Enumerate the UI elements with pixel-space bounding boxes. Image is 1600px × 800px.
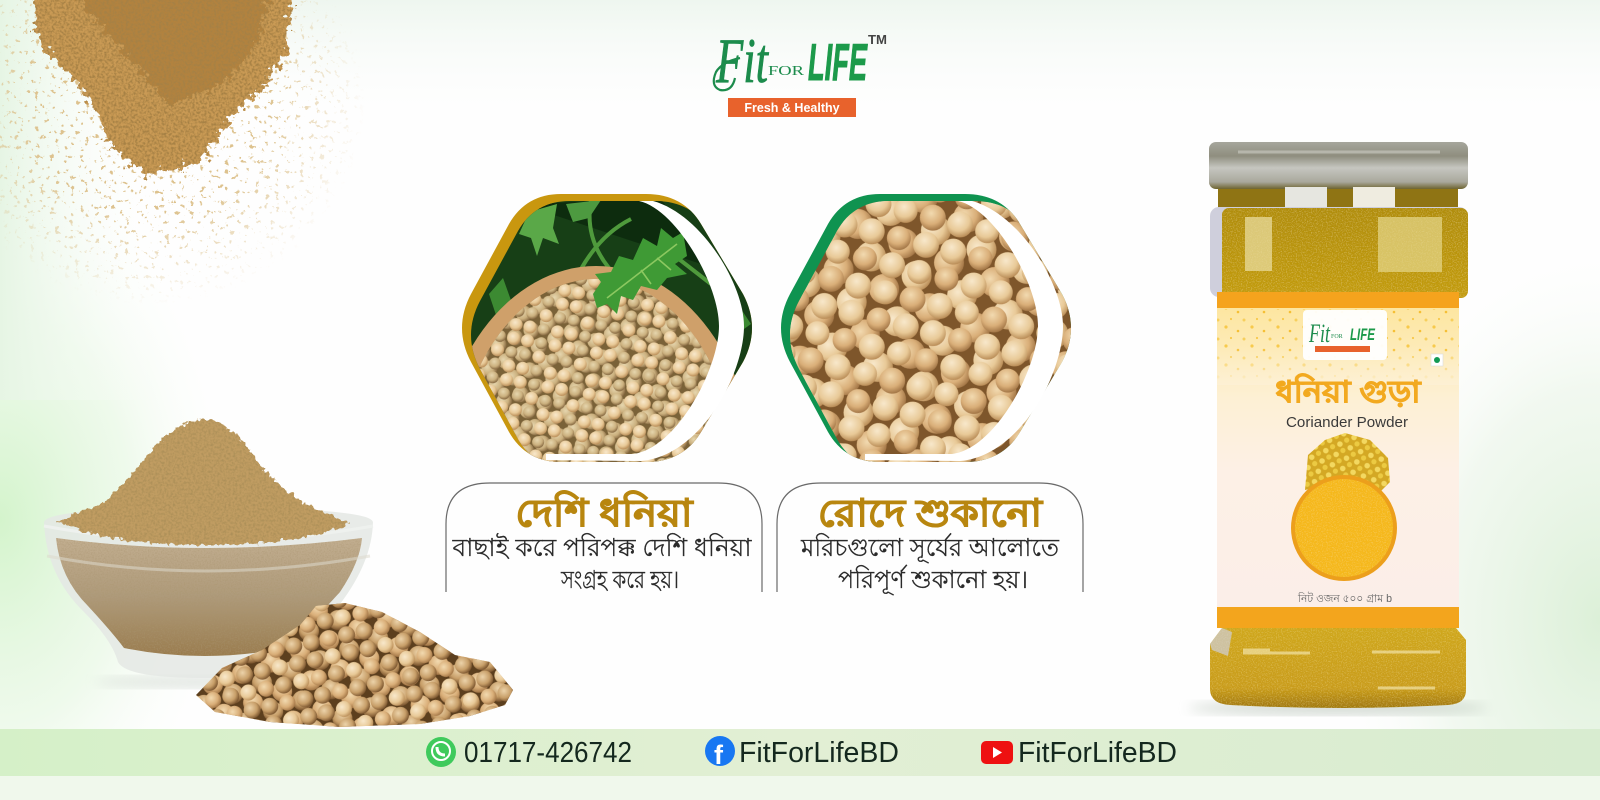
logo: Fit For Life: LIFE — [808, 34, 868, 92]
card: native coriander: সংগ্রহ করে হয়। — [560, 566, 679, 594]
logo: Fit For Life — [714, 25, 887, 117]
jar neck — [1218, 187, 1458, 209]
coriander powder spill, top left — [0, 0, 365, 305]
white curved band — [865, 201, 1063, 461]
whatsapp contact: 01717-426742 — [464, 737, 632, 769]
contact bar — [0, 729, 1600, 776]
card: sun dried: পরিপূর্ণ শুকানো হয়। — [838, 565, 1028, 595]
product jar — [1188, 142, 1488, 715]
label seeds heap — [1305, 433, 1390, 492]
white curved band — [546, 201, 744, 461]
label logo: LIFE — [1350, 325, 1375, 344]
jar label: Coriander Powder — [1286, 415, 1408, 431]
pile of coriander seeds — [196, 603, 513, 727]
card: sun dried — [777, 483, 1083, 595]
youtube contact: FitForLifeBD — [1018, 737, 1177, 769]
card: native coriander: বাছাই করে পরিপক্ক দেশি ধনিয়া — [452, 533, 752, 562]
jar label: নিট ওজন ৫০০ গ্রাম b — [1297, 592, 1392, 605]
facebook contact: f — [714, 740, 724, 770]
jar lower body — [1210, 628, 1466, 708]
logo: Fit For Life: Fit — [715, 25, 770, 96]
card: native coriander — [446, 483, 762, 594]
photo: coriander bowl with leaves, gold hexagon — [462, 194, 752, 462]
label logo: Fit — [1308, 319, 1331, 348]
veg mark — [1431, 354, 1443, 366]
glass bowl of coriander powder — [44, 419, 373, 688]
label logo — [1303, 310, 1387, 360]
card: native coriander: দেশি ধনিয়া — [516, 490, 695, 535]
card: sun dried: মরিচগুলো সূর্যের আলোতে — [800, 533, 1060, 563]
facebook contact: FitForLifeBD — [739, 737, 899, 769]
photo: dried coriander seeds, green hexagon — [781, 194, 1071, 462]
jar label: ধনিয়া গুড়া — [1276, 373, 1422, 409]
jar upper body — [1210, 207, 1468, 298]
card: sun dried: রোদে শুকানো — [818, 493, 1044, 535]
logo: Fit For Life: TM — [868, 33, 887, 47]
logo: Fit For Life: FOR — [768, 64, 805, 79]
label bowl of powder — [1291, 475, 1397, 581]
jar label — [1217, 292, 1459, 628]
logo: Fit For Life: Fresh & Healthy — [744, 101, 840, 115]
label logo: FOR — [1331, 334, 1343, 340]
jar lid — [1209, 142, 1468, 189]
